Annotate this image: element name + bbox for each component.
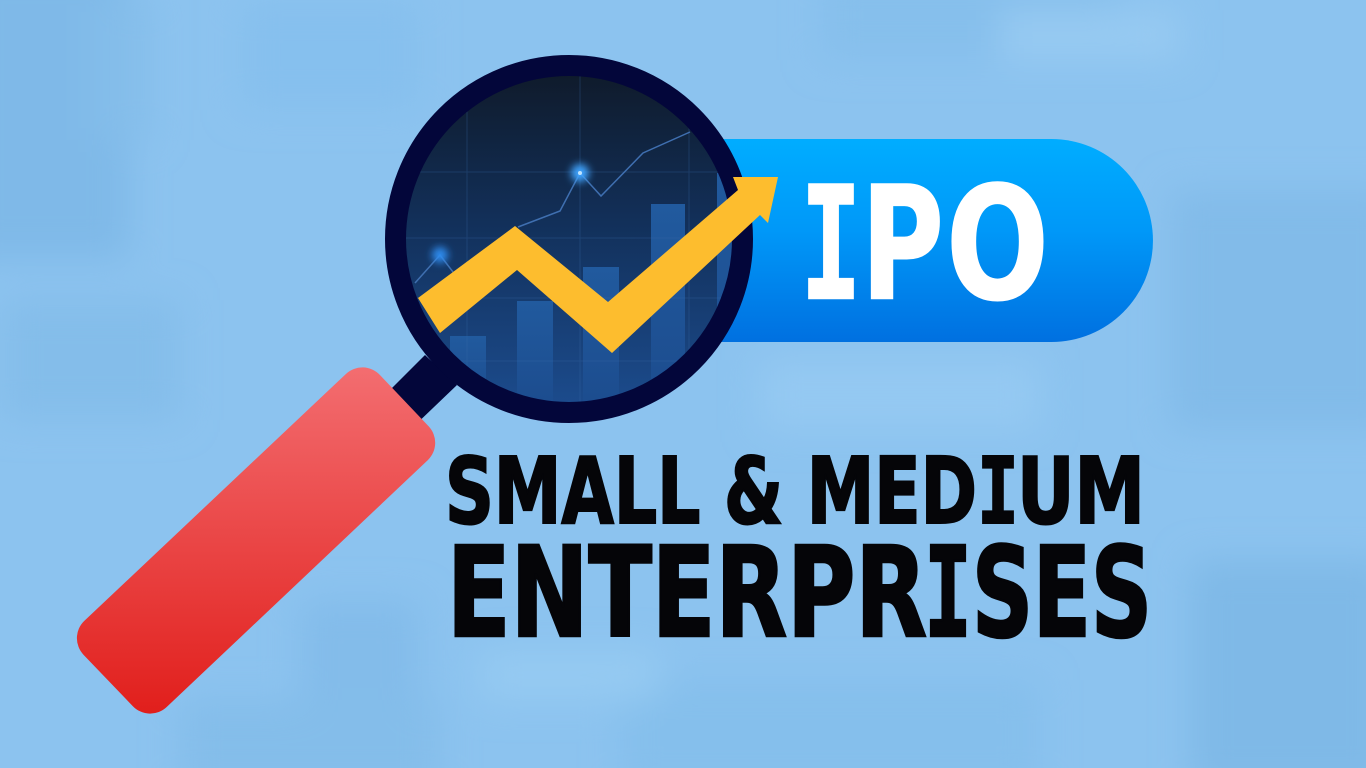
headline: [445, 438, 1152, 666]
blue IPO pill: [700, 139, 1153, 342]
lens ring: [396, 66, 742, 412]
red handle: [101, 391, 411, 690]
enterprises line: SES: [972, 521, 1152, 666]
lens trend line: [415, 132, 690, 283]
magnifying glass: [101, 66, 742, 690]
yellow arrow: [418, 177, 778, 353]
lens: [400, 70, 740, 410]
small and medium line: UM: [1017, 438, 1145, 545]
IPO label: I: [800, 154, 862, 336]
enterprises line: ENTERPR: [447, 521, 927, 666]
IPO label: [800, 154, 1049, 336]
small and medium line: I: [977, 438, 1019, 545]
IPO label: O: [946, 154, 1049, 336]
lens chart bars: [450, 173, 737, 407]
IPO label: P: [861, 154, 944, 336]
glow points: [432, 164, 589, 263]
enterprises line: I: [924, 521, 972, 666]
small and medium line: SMALL & MED: [445, 438, 977, 545]
handle neck: [380, 355, 457, 430]
